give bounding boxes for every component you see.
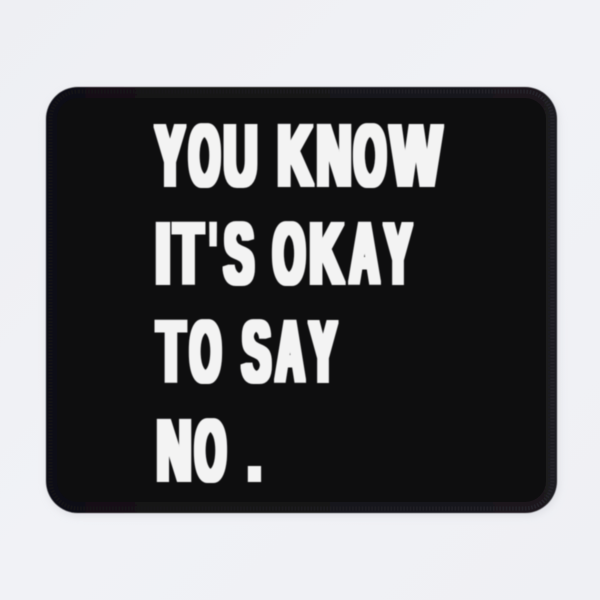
line 2: ' [212,206,214,302]
line 1: W [391,108,442,204]
mouse pad [46,87,559,516]
line 1: O [189,108,220,204]
line 2: O [273,206,305,302]
slogan text [155,108,442,500]
line 1: K [278,108,312,204]
line 3: S [242,304,271,400]
line 3: A [276,304,304,400]
mat shadow [47,90,559,516]
line 2: S [224,206,254,302]
slogan text: Y [385,206,411,302]
line 3: O [190,304,221,400]
line 1: O [354,108,386,204]
mat surface [57,98,546,502]
line 1: Y [156,108,184,204]
line 4: O [195,402,226,500]
line 1: N [317,108,352,204]
stitched border [46,87,557,513]
line 2: T [174,206,203,302]
slogan text: Y [310,304,336,400]
stitch highlight [50,92,552,508]
line 3: T [157,304,185,400]
line 2: I [155,206,171,302]
line 4: N [157,402,192,500]
line 1: U [224,108,257,204]
line 2: A [350,206,379,302]
line 4: . [247,402,262,500]
line 2: K [310,206,343,302]
